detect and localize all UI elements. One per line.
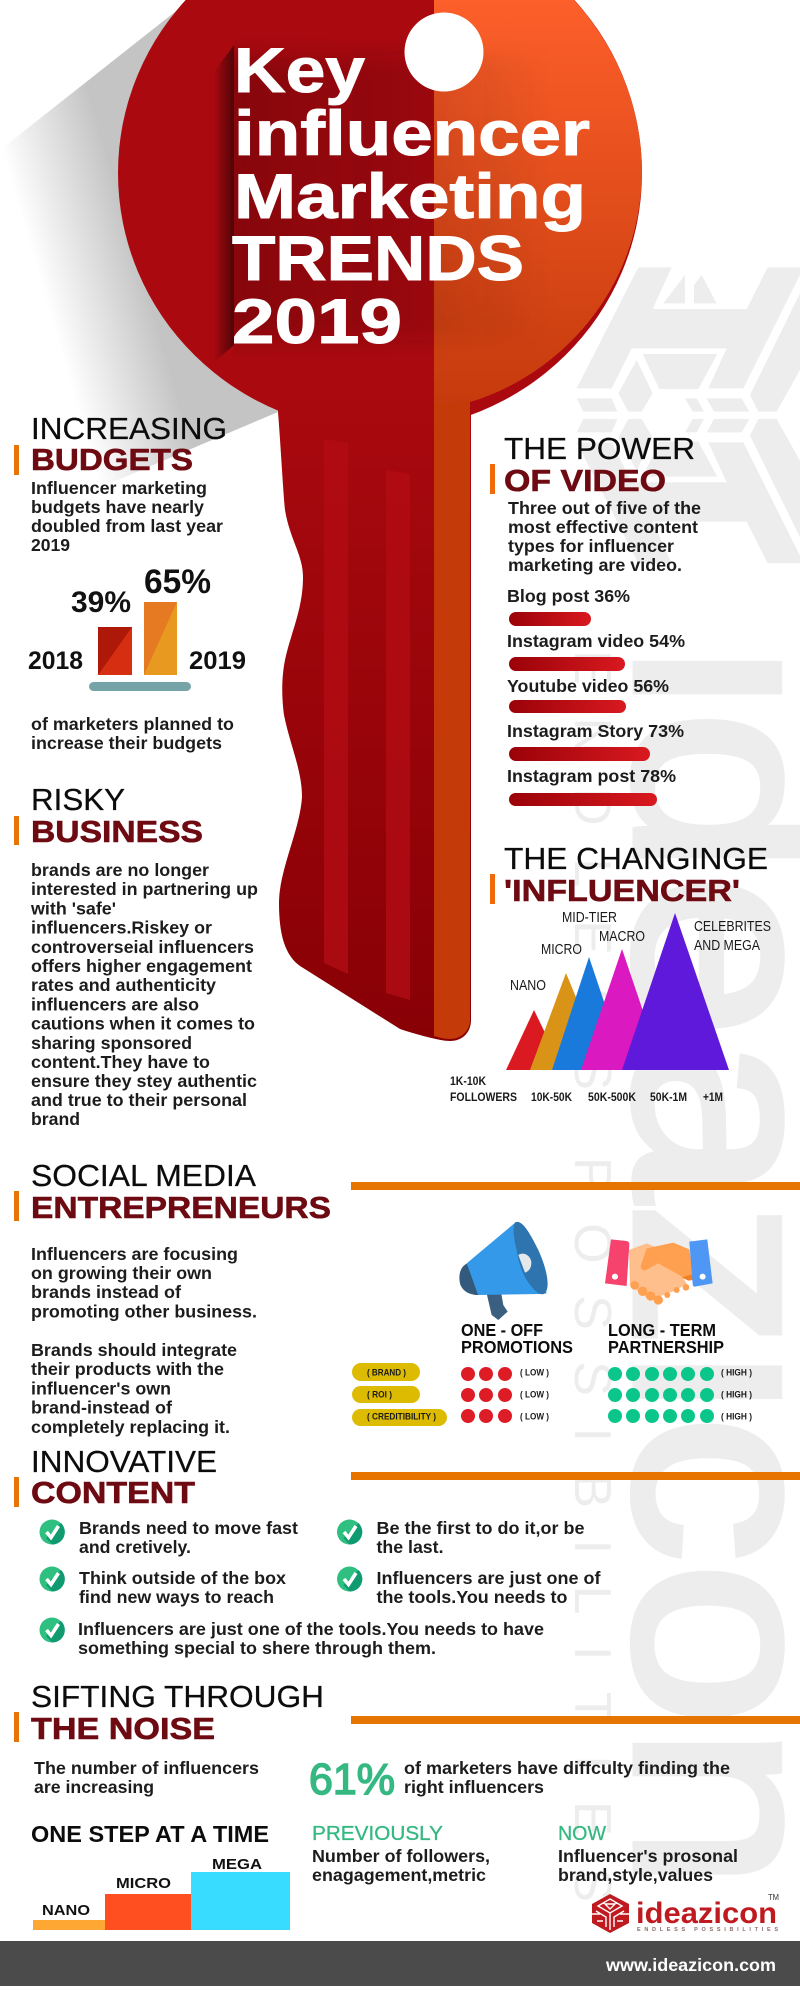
column: now: NOW	[558, 1823, 606, 1845]
heading: 'INFLUENCER'	[504, 873, 740, 908]
key hole	[404, 12, 484, 92]
heading: INNOVATIVE	[31, 1444, 217, 1479]
progress bars: Youtube video 56%	[507, 676, 669, 696]
column: now: Influencer's prosonal	[558, 1846, 738, 1866]
title shade	[220, 55, 550, 340]
bullet: move fast	[40, 1518, 298, 1557]
fold shadow	[214, 45, 234, 362]
title	[232, 36, 590, 357]
heading: OF VIDEO	[504, 463, 666, 498]
panel: social media entrepreneurs	[14, 1158, 800, 1437]
bullet: something special: something special to shere through them.	[78, 1638, 436, 1658]
heading: CONTENT	[31, 1475, 195, 1510]
comparison column titles: PROMOTIONS	[461, 1337, 573, 1357]
watermark: brand logo and vertical wordmark: POSSIBILITIES	[563, 1157, 621, 1902]
column: now: brand,style,values	[558, 1865, 713, 1885]
heading: RISKY	[31, 782, 125, 817]
footer bar: www.ideazicon.com	[605, 1955, 776, 1975]
intro text: most effective content	[508, 517, 698, 537]
follower axis labels: 1K-10K	[450, 1076, 487, 1088]
comparison column titles: ONE - OFF	[461, 1320, 543, 1340]
step chart: NANO	[42, 1902, 90, 1919]
follower axis labels: 10K-50K	[531, 1092, 573, 1104]
stat: 61%: of marketers have diffculty finding the	[404, 1758, 730, 1778]
panel: innovative content	[14, 1444, 800, 1658]
comparison column titles	[461, 1320, 724, 1357]
column: previously: enagagement,metric	[312, 1865, 486, 1885]
follower axis labels: +1M	[703, 1092, 723, 1104]
heading	[490, 431, 695, 498]
body text: content.They have to	[31, 1052, 210, 1072]
body text: interested in partnering up	[31, 879, 258, 899]
body text: sharing sponsored	[31, 1033, 192, 1053]
follower axis labels	[450, 1076, 723, 1104]
text: number of influencers: The number of influencers	[34, 1758, 259, 1778]
intro text: Influencer marketing	[31, 478, 207, 498]
progress bars: Blog post 36%	[507, 586, 630, 606]
shaft orange strip	[434, 400, 470, 1039]
bullet: move fast: Brands need to move fast	[79, 1518, 298, 1538]
body text: their products with the	[31, 1359, 224, 1379]
body text: on growing their own	[31, 1263, 212, 1283]
column: previously	[312, 1823, 490, 1885]
heading	[14, 1444, 800, 1510]
bar chart: 2019	[189, 647, 246, 675]
high rating dots: ( HIGH )	[721, 1368, 752, 1378]
icon: logo cube	[592, 1894, 629, 1933]
body text: brand-instead of	[31, 1398, 172, 1418]
title: Marketing	[234, 162, 586, 232]
bullet: think outside	[40, 1566, 286, 1607]
intro text: marketing are video.	[508, 555, 682, 575]
progress bars: Instagram Story 73%	[507, 721, 684, 741]
key head: red	[118, 0, 642, 431]
title: 2019	[232, 287, 402, 357]
low rating dots: ( LOW )	[520, 1390, 549, 1400]
footer bar	[0, 1941, 800, 1986]
body text: brands are no longer	[31, 860, 209, 880]
heading: BUSINESS	[31, 814, 203, 849]
caption: of marketers planned to	[31, 714, 234, 734]
body text: promoting other business.	[31, 1302, 257, 1322]
tier labels: NANO	[510, 977, 546, 994]
caption	[31, 714, 234, 753]
body text: completely replacing it.	[31, 1417, 230, 1437]
body text: offers higher engagement	[31, 956, 252, 976]
heading: SIFTING THROUGH	[31, 1679, 324, 1714]
bullet: tools	[337, 1566, 601, 1607]
bar chart: 65%	[144, 563, 211, 601]
panel: the power of video	[490, 431, 701, 806]
brand logo: TM	[768, 1893, 779, 1902]
progress bars	[507, 586, 685, 806]
title: Key	[234, 36, 365, 106]
comparison column titles: PARTNERSHIP	[608, 1337, 724, 1357]
low rating dots: ( LOW )	[520, 1368, 549, 1378]
heading	[14, 1158, 800, 1225]
heading	[14, 411, 227, 477]
progress bars: Instagram video 54%	[507, 631, 685, 651]
intro text: doubled from last year	[31, 516, 223, 536]
stat: 61%	[309, 1755, 730, 1804]
follower axis labels: FOLLOWERS	[450, 1092, 517, 1104]
high rating dots: ( HIGH )	[721, 1412, 752, 1422]
text: number of influencers	[34, 1758, 259, 1797]
bullet: move fast: and cretively.	[79, 1537, 191, 1557]
comparison row pills	[352, 1363, 447, 1426]
body text: brand	[31, 1109, 80, 1129]
bullet: tools: Influencers are just one of	[376, 1568, 601, 1588]
key long shadow	[0, 0, 278, 530]
intro text	[508, 498, 701, 575]
icon: handshake	[605, 1239, 713, 1305]
bar chart: 2018	[28, 647, 83, 675]
heading: INCREASING	[31, 411, 227, 446]
panel: risky business	[14, 782, 258, 1129]
shaft stripes	[324, 439, 410, 1000]
intro text: Three out of five of the	[508, 498, 701, 518]
body text: ensure they stey authentic	[31, 1071, 257, 1091]
low rating dots: ( LOW )	[520, 1412, 549, 1422]
heading: THE NOISE	[31, 1711, 215, 1746]
step chart: MEGA	[212, 1856, 262, 1873]
heading	[14, 782, 203, 849]
title: influencer	[234, 99, 590, 169]
high rating dots: ( HIGH )	[721, 1390, 752, 1400]
body text	[31, 1244, 257, 1437]
key shaft	[278, 400, 471, 1041]
intro text: 2019	[31, 535, 70, 555]
step chart	[33, 1856, 290, 1930]
comparison row pills: ( ROI )	[367, 1390, 392, 1400]
body text: cautions when it comes to	[31, 1014, 255, 1034]
panel: sifting through the noise	[14, 1679, 800, 1930]
title: TRENDS	[232, 224, 524, 294]
step chart: MICRO	[116, 1875, 171, 1892]
bullet: be first: Be the first to do it,or be	[376, 1518, 585, 1538]
key illustration	[118, 0, 642, 1041]
body text: Influencers are focusing	[31, 1244, 238, 1264]
progress bars: Instagram post 78%	[507, 766, 676, 786]
tier labels	[510, 909, 771, 994]
heading: THE CHANGINGE	[504, 841, 768, 876]
brand logo	[592, 1893, 779, 1933]
bullet: be first	[337, 1518, 585, 1557]
bar chart	[28, 563, 246, 691]
comparison row pills: ( CREDITIBILITY )	[367, 1412, 436, 1422]
body text: influencers are also	[31, 994, 199, 1014]
tier labels: MACRO	[599, 928, 645, 945]
intro text: budgets have nearly	[31, 497, 204, 517]
panel: the changing influencer	[450, 841, 771, 1104]
high rating dots	[608, 1367, 752, 1423]
brand logo: ENDLESS POSSIBILITIES	[637, 1927, 778, 1933]
heading	[490, 841, 768, 908]
body text	[30, 860, 258, 1129]
bullet: be first: the last.	[376, 1537, 444, 1557]
body text: Brands should integrate	[31, 1340, 237, 1360]
bullet: something special	[40, 1618, 544, 1658]
bullet: tools: the tools.You needs to	[376, 1587, 568, 1607]
tier labels: AND MEGA	[694, 937, 760, 954]
tier labels: CELEBRITES	[694, 918, 771, 935]
body text: rates and authenticity	[31, 975, 216, 995]
body text: brands instead of	[31, 1282, 181, 1302]
text: number of influencers: are increasing	[34, 1777, 154, 1797]
body text: controverseial influencers	[31, 937, 254, 957]
stat: 61%: 61%	[309, 1755, 395, 1804]
heading: SOCIAL MEDIA	[31, 1158, 256, 1193]
bullet: think outside: find new ways to reach	[79, 1587, 274, 1607]
triangle chart	[506, 913, 729, 1070]
body text: influencer's own	[31, 1378, 171, 1398]
bullet: think outside: Think outside of the box	[79, 1568, 286, 1588]
heading: THE POWER	[504, 431, 695, 466]
watermark: brand logo and vertical wordmark	[563, 267, 800, 1902]
heading	[14, 1679, 800, 1746]
heading: BUDGETS	[31, 442, 193, 477]
body text: influencers.Riskey or	[31, 918, 212, 938]
caption: increase their budgets	[31, 733, 222, 753]
icon: megaphone	[459, 1222, 548, 1320]
column: previously: Number of followers,	[312, 1846, 490, 1866]
bar chart: 39%	[71, 586, 131, 619]
column: previously: PREVIOUSLY	[312, 1823, 443, 1845]
comparison row pills: ( BRAND )	[367, 1368, 406, 1378]
brand logo: ideazicon	[636, 1897, 777, 1930]
bullet: something special: Influencers are just one of the tools.You needs to have	[78, 1619, 544, 1639]
stat: 61%: right influencers	[404, 1777, 544, 1797]
key head: orange half	[434, 0, 642, 410]
intro text: types for influencer	[508, 536, 674, 556]
watermark: brand logo and vertical wordmark: ENDLESS	[563, 650, 621, 1090]
low rating dots	[461, 1367, 549, 1423]
body text: with 'safe'	[30, 898, 116, 918]
heading: ENTREPRENEURS	[31, 1190, 331, 1225]
comparison column titles: LONG - TERM	[608, 1320, 716, 1340]
tier labels: MID-TIER	[562, 909, 617, 926]
panel: increasing budgets	[14, 411, 246, 753]
follower axis labels: 50K-500K	[588, 1092, 637, 1104]
body text: and true to their personal	[31, 1090, 247, 1110]
subheading: one step at a time: ONE STEP AT A TIME	[31, 1821, 269, 1847]
column: now	[558, 1823, 738, 1885]
follower axis labels: 50K-1M	[650, 1092, 687, 1104]
intro text	[31, 478, 223, 555]
tier labels: MICRO	[541, 941, 582, 958]
